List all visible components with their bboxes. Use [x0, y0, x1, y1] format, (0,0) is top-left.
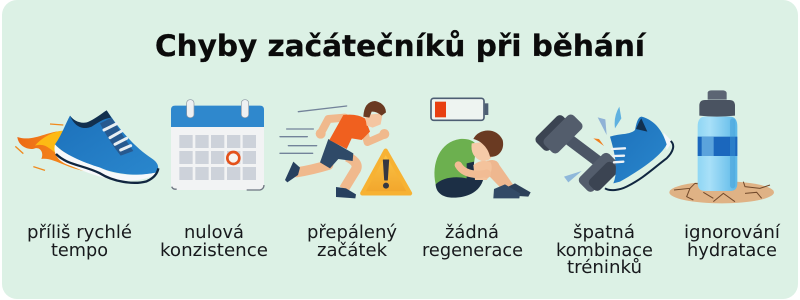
- icon: running shoe with flames: [15, 110, 158, 183]
- label: ignorování hydratace: hydratace: [687, 240, 777, 261]
- label: nulová konzistence: nulová: [184, 222, 244, 243]
- icon: low battery: [431, 98, 488, 120]
- label: příliš rychlé tempo: tempo: [51, 240, 108, 261]
- label: nulová konzistence: konzistence: [160, 240, 268, 261]
- label: špatná kombinace tréninků: tréninků: [567, 257, 642, 278]
- icon: calendar: [171, 100, 264, 190]
- icon: shoe hit by dumbbell: [564, 107, 673, 190]
- label: přepálený začátek: začátek: [317, 240, 388, 261]
- label: příliš rychlé tempo: příliš rychlé: [27, 222, 132, 243]
- icon: water bottle on cracked ground: [669, 90, 774, 203]
- label: příliš rychlé tempo: [27, 222, 132, 261]
- title: Chyby začátečníků při běhání: [155, 29, 647, 63]
- label: přepálený začátek: [307, 222, 397, 261]
- label: nulová konzistence: [160, 222, 268, 261]
- label: žádná regenerace: [422, 222, 523, 261]
- label: žádná regenerace: regenerace: [422, 240, 523, 261]
- label: špatná kombinace tréninků: [556, 222, 653, 278]
- label: žádná regenerace: žádná: [445, 222, 499, 243]
- icon: exhausted sitting person: [434, 130, 531, 198]
- icon: sprinting runner: [280, 101, 389, 198]
- icon: dumbbell: [534, 113, 620, 194]
- label: ignorování hydratace: ignorování: [684, 222, 781, 243]
- icon: warning triangle: [362, 151, 410, 193]
- label: přepálený začátek: přepálený: [307, 222, 397, 243]
- label: špatná kombinace tréninků: špatná: [573, 222, 635, 243]
- label: špatná kombinace tréninků: kombinace: [556, 240, 653, 261]
- label: ignorování hydratace: [684, 222, 781, 261]
